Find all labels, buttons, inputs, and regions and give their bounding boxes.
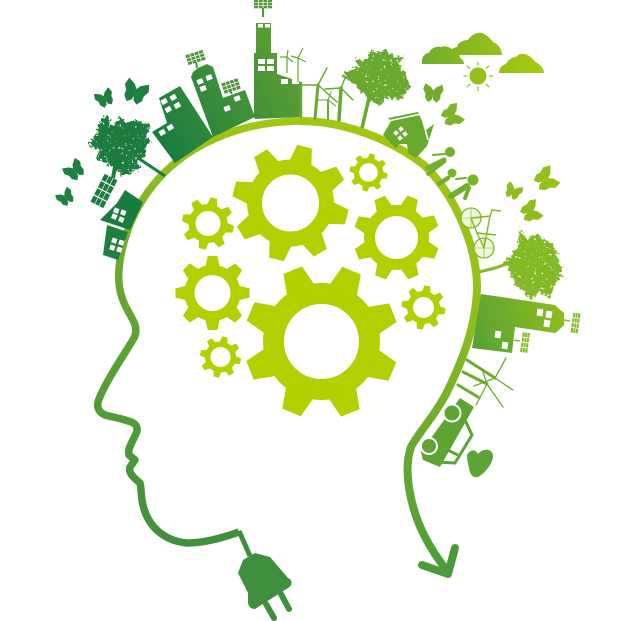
heart — [467, 450, 493, 477]
windmills: lower right — [458, 358, 513, 407]
house: lower — [103, 225, 128, 260]
tree: left with solar panel — [89, 116, 165, 208]
windmills on arc — [300, 68, 353, 120]
cloud, sun — [422, 33, 544, 91]
building: right — [472, 294, 580, 353]
gears — [176, 133, 452, 442]
windmills on roof — [280, 48, 306, 82]
arrow head — [422, 548, 455, 574]
bicycle — [461, 208, 501, 258]
cloud: right — [499, 54, 544, 73]
tree: right with branch — [479, 228, 563, 300]
building: middle stepped — [191, 64, 255, 137]
butterflies: right — [422, 83, 561, 226]
head outline: face and cord — [98, 121, 303, 543]
solar panels on middle building — [185, 50, 241, 94]
house: upper — [100, 190, 143, 230]
gear: lower left small — [196, 333, 245, 381]
butterflies: left — [54, 77, 151, 209]
solar panel under tree — [91, 174, 117, 208]
solar panels on right building — [514, 313, 580, 353]
gear: top centre — [220, 133, 361, 273]
gear: large centre — [221, 241, 422, 442]
cloud: top — [448, 33, 502, 55]
electric car — [421, 398, 474, 467]
building: tilted left — [152, 86, 213, 163]
gear: upper right small — [346, 150, 391, 195]
cloud: left — [422, 46, 464, 64]
houses: left — [100, 190, 143, 260]
building: tall tower — [254, 18, 301, 119]
gear: right — [341, 182, 452, 293]
head outline: crown and arrow tail — [300, 121, 477, 572]
gear: lower right small — [398, 282, 449, 333]
sun — [464, 62, 493, 91]
gear: upper left small — [177, 192, 239, 255]
people holding hands — [428, 147, 478, 198]
tree: top with trunk — [342, 49, 410, 128]
plug — [238, 531, 292, 618]
city buildings — [152, 0, 353, 163]
house: top right — [383, 112, 434, 158]
gear: left middle — [176, 256, 250, 330]
solar panel on tower — [254, 0, 272, 17]
